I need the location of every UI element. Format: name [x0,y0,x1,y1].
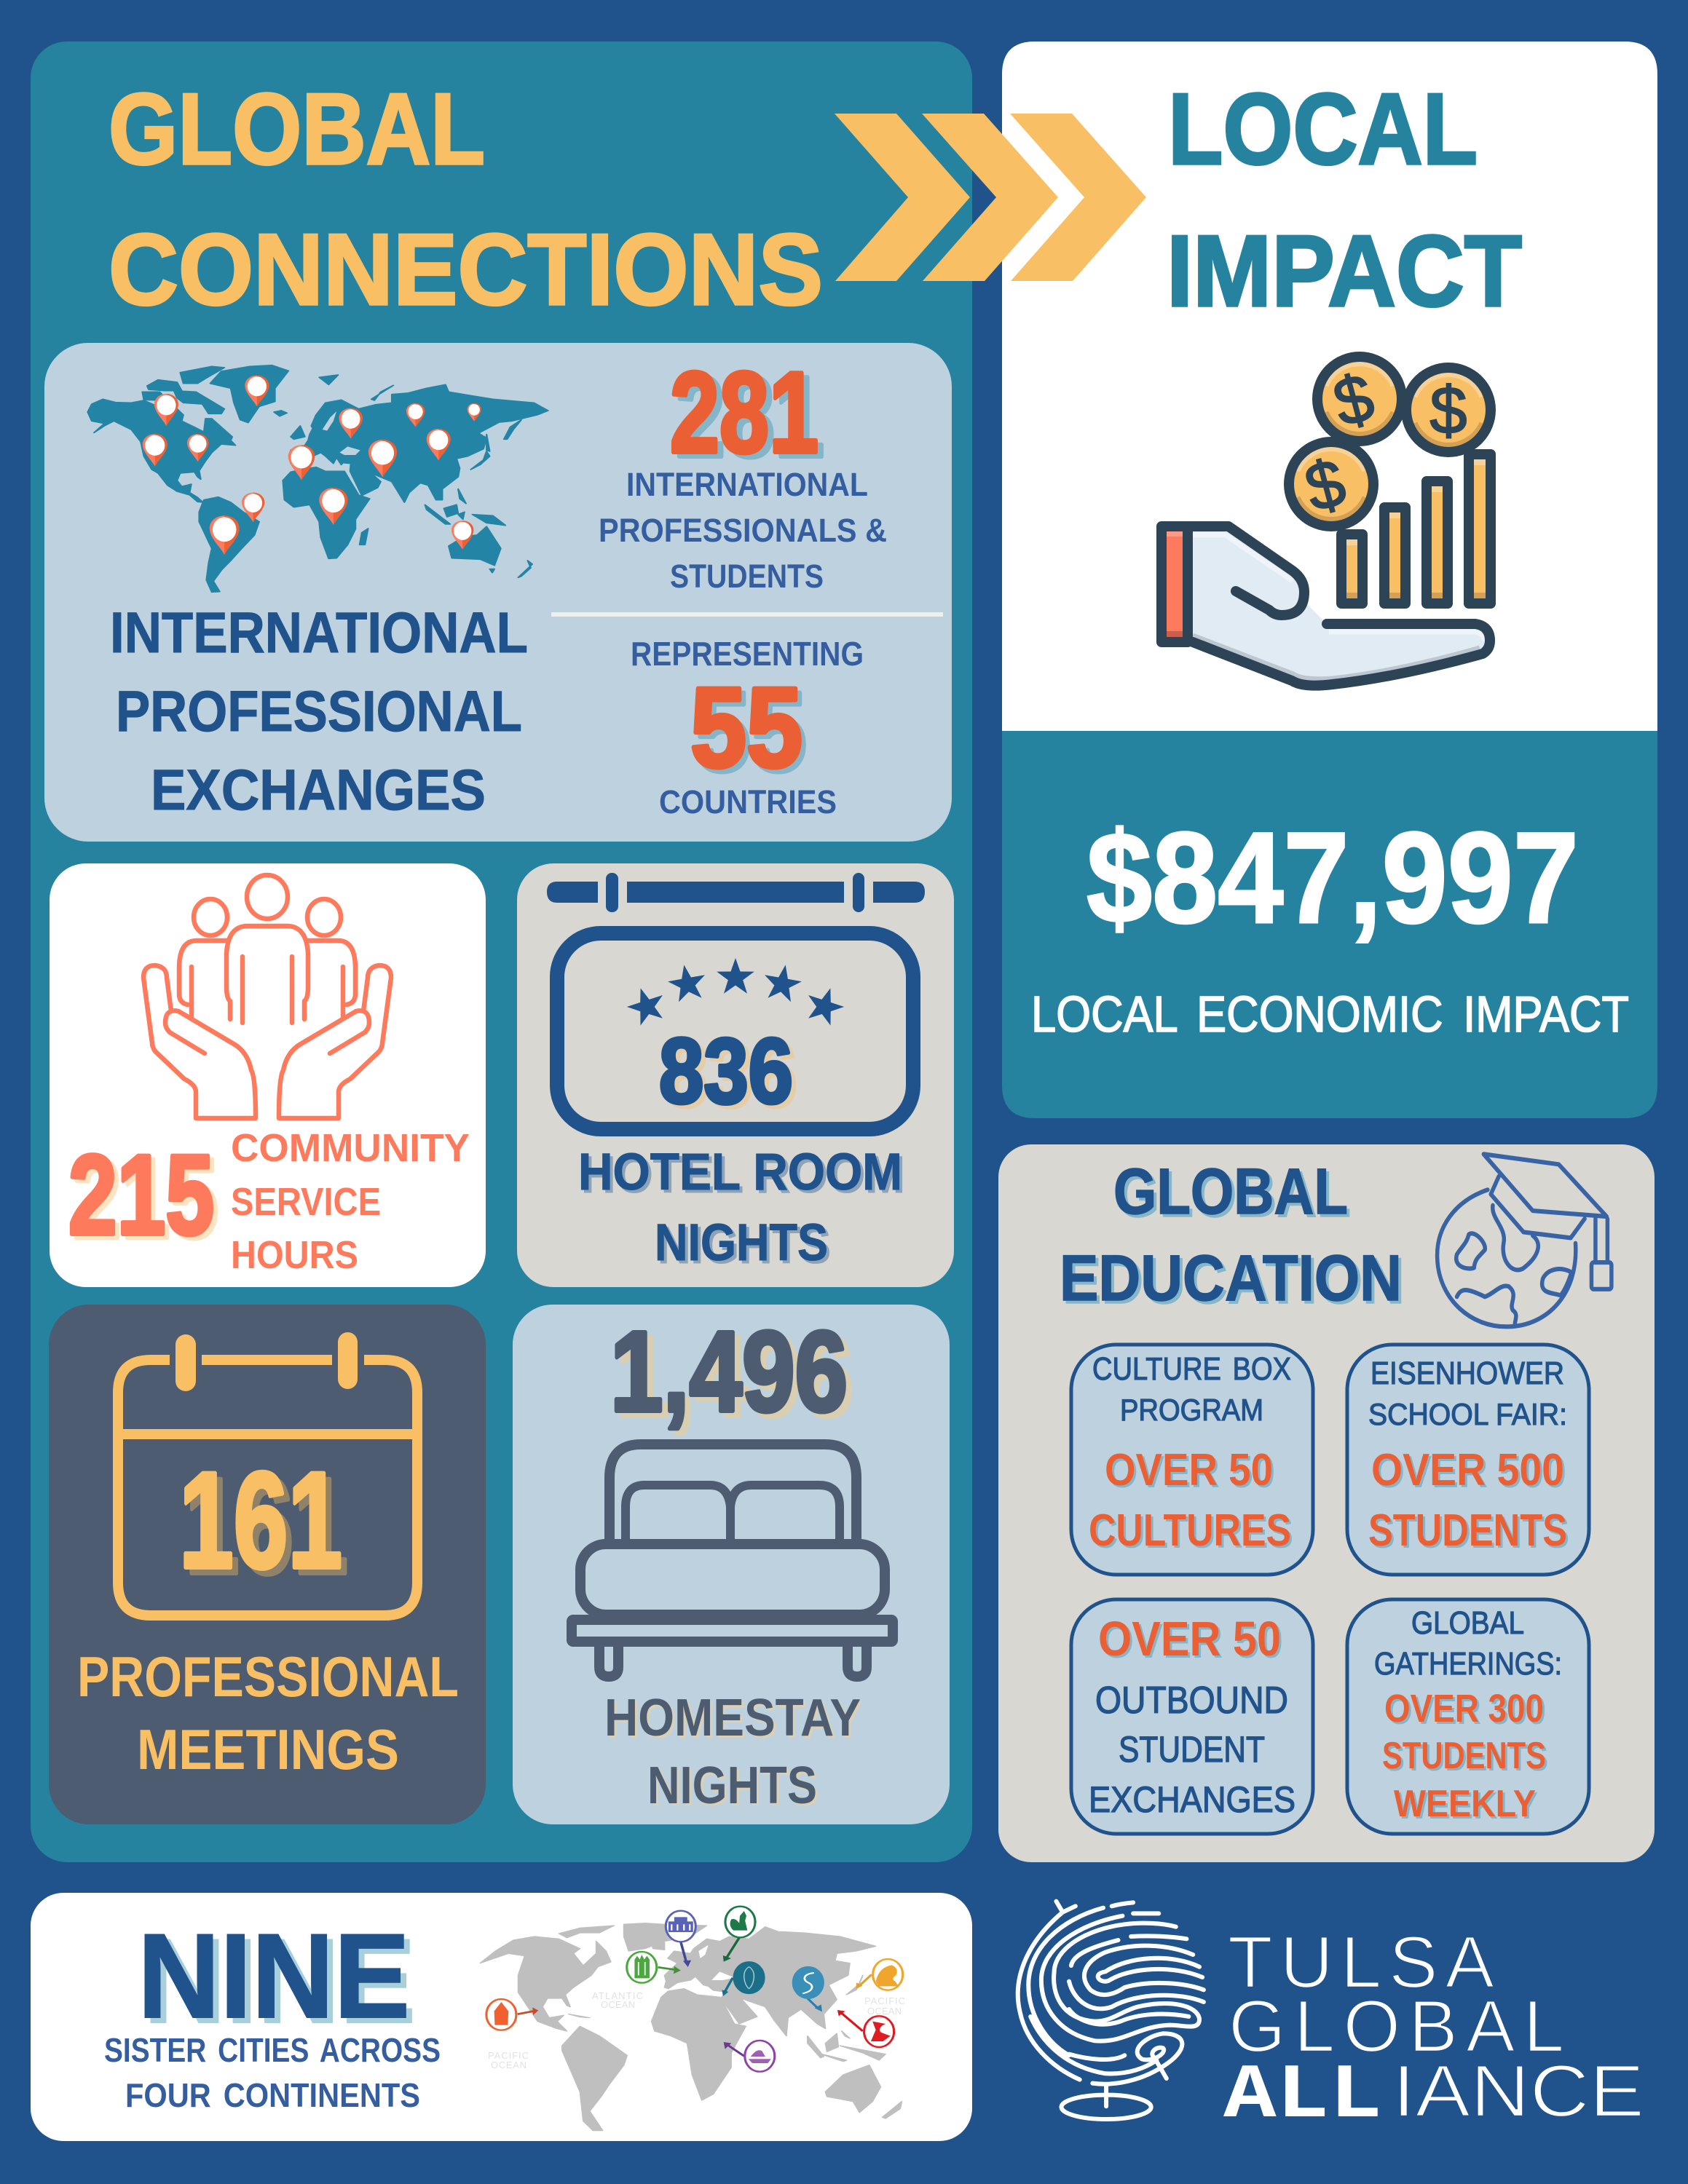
heading: global education: GLOBAL [1113,1155,1348,1227]
badge: indigo palace [666,1911,695,1942]
label: hotel room nights: NIGHTS [655,1214,828,1272]
stat: 281: 281 [676,353,824,481]
label: homestay nights [604,1689,863,1817]
title: local impact [1167,73,1522,328]
hand outline [1188,526,1490,686]
box: culture box program: OVER 50 [1107,1447,1275,1497]
box: culture box program: CULTURE BOX [1092,1351,1291,1387]
title: local impact: LOCAL [1168,73,1478,186]
box: global gatherings: OVER 300 [1384,1687,1544,1730]
icon: hands holding people [143,875,391,1118]
ocean labels: PACIFIC [488,2050,529,2061]
wordmark: ALL [1223,2052,1382,2140]
coin highlights and shading [1298,364,1482,519]
label: homestay nights: HOMESTAY [604,1689,861,1747]
title: global connections [109,73,823,326]
label: professional meetings: PROFESSIONAL [77,1645,459,1709]
label: international professionals and students: INTERNATIONAL [626,466,868,503]
heading: international professional exchanges: PROFESSIONAL [116,678,522,743]
label: community service hours: HOURS [231,1233,358,1277]
stat: 836: 836 [659,1019,793,1123]
box: global gatherings: GATHERINGS: [1374,1646,1562,1682]
label: hotel room nights: HOTEL ROOM [578,1144,902,1201]
badge: teal [734,1962,764,1993]
box: eisenhower school fair: STUDENTS [1370,1508,1569,1558]
ocean labels: OCEAN [491,2060,526,2070]
label: sister cities across four continents [104,2031,441,2114]
label: international professionals and students: STUDENTS [670,558,824,595]
icon: hotel sign [547,873,925,1129]
coins [1289,357,1491,526]
badge: amber fish [873,1959,903,1990]
heading: nine: NINE [143,1914,416,2048]
badge: blue [793,1967,823,1998]
icon: bed [572,1444,893,1677]
ocean labels [488,1990,905,2070]
cuff shading [1167,531,1183,637]
title: global connections: GLOBAL [109,73,485,186]
heading: global education: EDUCATION [1060,1241,1402,1314]
stat: local economic impact: $847,997 [1086,805,1579,950]
label: sister cities across four continents: FOUR CONTINENTS [125,2076,420,2114]
wordmark: GLOBAL [1228,1986,1564,2068]
label: professional meetings: MEETINGS [137,1717,399,1781]
box: global gatherings [1347,1599,1589,1834]
logo: tulsa global alliance [1018,1902,1644,2140]
arrows: chevrons [835,114,1146,281]
card: professional meetings [49,1305,486,1824]
heading: international professional exchanges: INTERNATIONAL [110,600,528,665]
label: hotel room nights [578,1144,905,1275]
badge: purple boat [745,2041,775,2072]
badge: green cathedral [627,1952,657,1983]
label: hotel room nights: NIGHTS [658,1217,831,1275]
panel: international professional exchanges [44,343,952,842]
box: global gatherings: STUDENTS [1382,1735,1546,1777]
hand shading [1193,535,1485,679]
card: homestay nights [513,1305,950,1824]
icon: hand with coins and bars [1162,357,1491,686]
label: homestay nights: HOMESTAY [607,1691,863,1749]
label: community service hours [231,1126,470,1277]
continents [480,1923,902,2131]
hand [1188,526,1490,686]
stat: 161: 161 [179,1444,342,1597]
box: eisenhower school fair: OVER 500 [1373,1447,1566,1497]
heading: nine: NINE [138,1909,410,2043]
box: outbound student exchanges: EXCHANGES [1089,1779,1295,1820]
box: global gatherings: GLOBAL [1411,1605,1524,1641]
label: international professionals and students: PROFESSIONALS & [599,512,887,549]
icon: globe with graduation cap [1437,1154,1612,1326]
label: representing: REPRESENTING [631,635,864,673]
ocean labels: PACIFIC [864,1995,905,2006]
stat: 161: 161 [185,1449,348,1602]
box: eisenhower school fair: STUDENTS [1368,1506,1567,1556]
ocean labels: ATLANTIC [592,1990,643,2001]
box: eisenhower school fair: SCHOOL FAIR: [1368,1397,1567,1431]
wordmark [1223,1922,1644,2140]
stat: 1,496: 1,496 [610,1308,848,1436]
map pins [143,376,481,555]
box: global gatherings: WEEKLY [1396,1785,1538,1827]
box: outbound student exchanges: OUTBOUND [1095,1679,1288,1722]
ocean labels: OCEAN [867,2006,902,2017]
stat: 1,496: 1,496 [616,1313,853,1441]
arrow heads [532,1955,863,2049]
badge: green squirrel [725,1907,755,1937]
stat: 55: 55 [690,665,802,791]
icon: fingerprint globe [1018,1902,1204,2119]
dollar signs: $ [1326,360,1381,441]
stat: 55: 55 [695,669,807,796]
box: culture box program: CULTURES [1091,1508,1293,1558]
heading: global education [1060,1155,1405,1317]
ocean labels: OCEAN [601,1999,635,2010]
box: global gatherings: OVER 300 [1387,1689,1546,1733]
box: global gatherings: STUDENTS [1384,1737,1548,1779]
label: community service hours: COMMUNITY [231,1126,470,1170]
panel: sister cities [31,1893,972,2141]
bars [1341,454,1491,604]
city badges [486,1907,903,2072]
world map with pins [87,365,548,592]
heading: global education: EDUCATION [1062,1244,1405,1317]
label: hotel room nights: HOTEL ROOM [581,1147,905,1204]
icon: calendar [118,1332,417,1615]
panel: global education [998,1144,1655,1862]
inland seas [698,1945,734,1980]
wordmark: TULSA [1228,1922,1495,2003]
dollar signs: $ [1298,445,1353,526]
stat: 281: 281 [670,349,819,477]
label: community service hours: SERVICE [231,1180,381,1224]
box: culture box program [1071,1345,1313,1575]
stat: 215: 215 [73,1136,218,1262]
box: eisenhower school fair: OVER 500 [1371,1445,1564,1495]
coin outlines [1289,357,1491,526]
card: hotel room nights [517,863,954,1287]
label: international professionals and students [599,466,887,595]
card: community service hours [50,863,486,1287]
badge: orange tower [486,1999,516,2030]
city arrows [518,1938,872,2056]
label: homestay nights: NIGHTS [650,1759,819,1817]
badge: red dragon [864,2016,894,2047]
label: professional meetings [77,1645,459,1781]
continents [87,365,548,592]
box: culture box program: CULTURES [1089,1506,1291,1556]
stat: 215: 215 [68,1132,214,1259]
title: local impact: IMPACT [1167,215,1522,328]
heading: international professional exchanges [110,600,528,822]
box: eisenhower school fair [1347,1345,1589,1575]
title: global connections: CONNECTIONS [109,213,823,326]
label: sister cities across four continents: SISTER CITIES ACROSS [104,2031,441,2069]
box: culture box program: OVER 50 [1105,1445,1273,1495]
box: global gatherings: WEEKLY [1394,1783,1536,1825]
heading: international professional exchanges: EXCHANGES [151,757,486,822]
label: countries: COUNTRIES [659,783,837,820]
box: outbound student exchanges: OVER 50 [1098,1612,1281,1666]
box: outbound student exchanges: STUDENT [1119,1729,1265,1770]
box: outbound student exchanges [1071,1599,1313,1834]
heading: global education: GLOBAL [1116,1158,1351,1230]
dollar signs [1298,360,1467,526]
box: outbound student exchanges: OVER 50 [1100,1614,1283,1669]
cuff [1162,526,1188,642]
dollar signs: $ [1429,373,1467,448]
panel: local impact [1002,41,1657,1118]
panel: global connections [31,41,972,1862]
box: culture box program: PROGRAM [1120,1393,1263,1427]
stat: 836: 836 [663,1023,797,1126]
label: homestay nights: NIGHTS [647,1757,817,1815]
box: eisenhower school fair: EISENHOWER [1370,1356,1564,1391]
wordmark: IANCE [1392,2051,1644,2132]
sister cities map [480,1907,903,2131]
inland seas [323,411,360,455]
